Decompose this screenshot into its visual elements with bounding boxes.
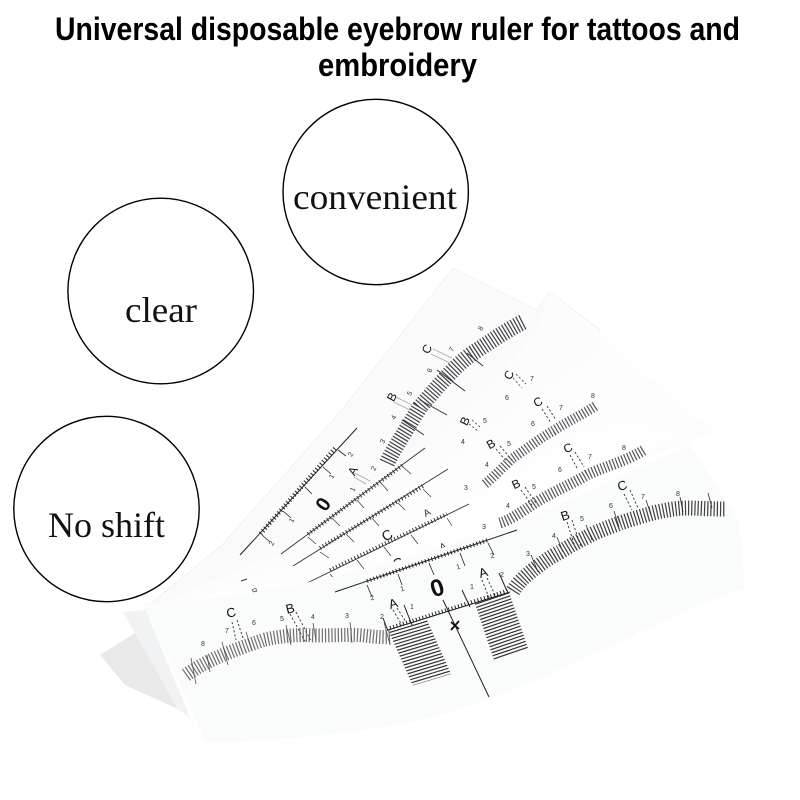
scale letters and numbers: 3 xyxy=(345,613,349,620)
ruler strip 4: 7 xyxy=(588,454,592,461)
ruler strip 1 (back): 1 xyxy=(288,517,296,524)
ruler strip 2: C xyxy=(501,368,517,382)
ruler strip 2: B xyxy=(457,414,473,428)
ruler strip 3: B xyxy=(484,436,498,452)
badge: clear: clear xyxy=(125,290,197,330)
right brow hatch xyxy=(513,508,725,591)
ruler strip 4: C xyxy=(390,554,406,572)
scale letters and numbers: 2 xyxy=(500,572,504,579)
scale letters and numbers: C xyxy=(225,604,237,621)
scale letters and numbers: 7 xyxy=(641,494,645,501)
scale letters and numbers: 5 xyxy=(280,616,284,623)
ruler sheet stack xyxy=(100,268,745,742)
ruler strip 1 (back): 1 xyxy=(328,473,336,480)
badge: no shift xyxy=(14,416,199,602)
ruler strip 5 (front): 1 xyxy=(400,585,405,593)
badge: clear xyxy=(68,198,254,384)
scale letters and numbers: 6 xyxy=(609,503,613,510)
ruler strip 2: 7 xyxy=(530,376,534,383)
scale letters and numbers: 1 xyxy=(470,584,474,591)
ruler strip 3: 7 xyxy=(559,405,563,412)
ruler strip 1 (back): 6 xyxy=(426,367,434,374)
ruler strip 1 (back): 3 xyxy=(379,438,387,445)
ruler strip 3: 8 xyxy=(591,393,595,400)
badge: no shift: No shift xyxy=(48,505,165,545)
backing sheet shadow xyxy=(100,633,180,710)
ruler strip 3: 5 xyxy=(507,441,511,448)
ruler strip 4: 5 xyxy=(532,484,536,491)
icon: cross mark xyxy=(451,621,459,630)
ruler strip 4: R xyxy=(250,586,260,597)
ruler strip 1 (back): A xyxy=(345,464,361,478)
ruler strip 2 xyxy=(160,292,690,603)
title xyxy=(55,11,740,83)
strip sheet xyxy=(143,445,745,742)
hatch block right xyxy=(492,598,511,654)
ruler strip 1 (back) xyxy=(150,268,600,604)
ruler strip 4: 3 xyxy=(482,524,486,531)
ruler strip 1 (back): 2 xyxy=(347,451,355,458)
ruler strip 1 (back): 4 xyxy=(390,414,398,421)
badge: convenient xyxy=(283,99,468,285)
scale letters and numbers: 4 xyxy=(311,614,315,621)
scale letters and numbers: 1 xyxy=(410,604,414,611)
ruler strip 3: 3 xyxy=(464,485,468,492)
ruler strip 5 (front): 2 xyxy=(370,594,375,602)
scale letters and numbers: A xyxy=(387,595,400,612)
ruler strip 1 (back): 8 xyxy=(477,325,485,332)
scale letters and numbers: B xyxy=(284,600,296,617)
ruler strip 5 (front): 1 xyxy=(456,563,461,571)
scale letters and numbers: 2 xyxy=(380,614,384,621)
ruler strip 1 (back): 2 xyxy=(268,540,276,547)
scale letters and numbers: 5 xyxy=(580,516,584,523)
hatch block left xyxy=(408,626,432,680)
ruler strip 5 (front) xyxy=(143,445,745,742)
upper ruler line xyxy=(335,530,517,592)
guide dashes xyxy=(232,490,638,643)
scale letters and numbers: 3 xyxy=(526,551,530,558)
ruler strip 2: 4 xyxy=(461,439,465,446)
ruler strip 1 (back): 5 xyxy=(406,390,414,397)
ruler strip 2: 5 xyxy=(483,418,487,425)
ruler strip 2: 6 xyxy=(505,395,509,402)
ruler strip 4: A xyxy=(438,541,449,554)
ruler strip 3: C xyxy=(379,526,395,544)
brow scale line xyxy=(388,592,510,630)
ruler strip 1 (back): B xyxy=(384,390,400,404)
ruler strip 5 (front): 2 xyxy=(490,552,495,560)
scale letters and numbers: 6 xyxy=(252,620,256,627)
ruler strip 1 (back): 0 xyxy=(312,494,336,515)
ruler strip 1 (back): C xyxy=(419,342,435,356)
ruler strip 4: B xyxy=(509,476,523,492)
scale letters and numbers: A xyxy=(477,564,490,581)
ruler strip 5 (front): 0 xyxy=(427,574,448,603)
ruler strip 1 (back): 7 xyxy=(448,346,456,353)
ruler strip 1 (back): 2 xyxy=(370,465,378,472)
ruler strip 4: C xyxy=(561,440,575,456)
ruler strip 3: 4 xyxy=(485,462,489,469)
ruler strip 3: A xyxy=(422,507,433,520)
ruler strip 3: C xyxy=(531,394,546,410)
scale letters and numbers: B xyxy=(559,507,572,524)
folded sheet xyxy=(123,610,190,718)
ruler strip 4: 6 xyxy=(558,467,562,474)
title: embroidery xyxy=(318,47,477,83)
scale letters and numbers: 7 xyxy=(225,628,229,635)
ruler strip 3 xyxy=(170,345,715,603)
left brow hatch xyxy=(186,635,390,675)
ruler strip 4 xyxy=(180,420,690,603)
scale letters and numbers: 4 xyxy=(552,533,556,540)
ruler strip 4: 8 xyxy=(622,445,626,452)
scale letters and numbers: 8 xyxy=(201,641,205,648)
ruler strip 1 (back): 1 xyxy=(349,486,357,493)
scale letters and numbers xyxy=(201,477,680,648)
scale letters and numbers: 8 xyxy=(676,491,680,498)
ruler strip 3: 6 xyxy=(531,421,535,428)
scale letters and numbers: C xyxy=(615,477,629,494)
badge: convenient: convenient xyxy=(293,177,457,217)
ruler strip 4: 4 xyxy=(506,503,510,510)
